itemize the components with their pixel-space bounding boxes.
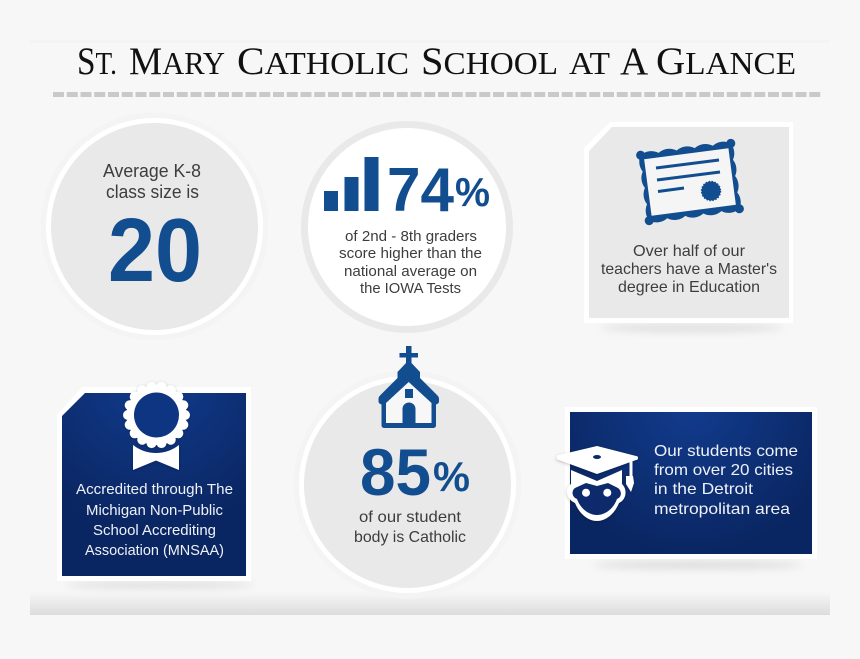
teachers text xyxy=(601,243,777,296)
panel: cities xyxy=(556,407,817,569)
title: AT xyxy=(569,45,610,81)
test scores text: score higher than the xyxy=(339,245,482,262)
catholic text: of our student xyxy=(359,509,462,526)
test scores text: of 2nd - 8th graders xyxy=(345,228,477,245)
test scores text: national average on xyxy=(344,263,477,280)
panel: test scores xyxy=(301,121,513,333)
74 percent: % xyxy=(455,169,490,215)
title: SCHOOL xyxy=(421,40,558,83)
title: CATHOLIC xyxy=(237,40,409,83)
title xyxy=(77,40,796,83)
cities text: Our students come xyxy=(654,443,798,460)
74 percent: 74 xyxy=(387,156,454,225)
74 percent xyxy=(387,156,490,225)
85 percent: 85 xyxy=(360,435,431,509)
panel: catholic student body xyxy=(294,346,522,598)
accreditation text: Accredited through The xyxy=(76,481,233,498)
85 percent: % xyxy=(433,453,470,500)
panel: accreditation xyxy=(57,382,255,589)
accreditation text xyxy=(76,481,233,559)
icon: bar chart xyxy=(324,157,378,211)
class size label: class size is xyxy=(106,182,199,202)
icon: ribbon xyxy=(123,382,190,470)
title: ST. xyxy=(77,40,117,83)
accreditation text: Michigan Non-Public xyxy=(86,502,223,519)
teachers text: Over half of our xyxy=(633,243,746,260)
cities text: from over 20 cities xyxy=(654,462,793,479)
title: GLANCE xyxy=(656,40,796,83)
icon: graduate xyxy=(556,446,638,521)
cities text xyxy=(654,443,798,518)
title: A xyxy=(620,40,648,83)
class size label xyxy=(103,161,201,202)
panel: class size xyxy=(40,112,268,340)
accreditation text: School Accrediting xyxy=(93,522,216,539)
panel: teachers xyxy=(584,122,793,332)
cities text: metropolitan area xyxy=(654,501,790,518)
catholic text: body is Catholic xyxy=(354,529,466,546)
cities text: in the Detroit xyxy=(654,481,754,498)
accreditation text: Association (MNSAA) xyxy=(85,542,224,559)
icon: diploma xyxy=(636,138,744,226)
teachers text: degree in Education xyxy=(618,279,760,296)
class size number: 20 xyxy=(108,201,202,301)
test scores text: the IOWA Tests xyxy=(360,280,461,297)
catholic text xyxy=(354,509,466,546)
test scores text xyxy=(339,228,482,297)
class size label: Average K-8 xyxy=(103,161,201,181)
teachers text: teachers have a Master's xyxy=(601,261,777,278)
title: MARY xyxy=(129,40,225,83)
icon: church xyxy=(378,346,439,428)
85 percent xyxy=(360,435,470,509)
